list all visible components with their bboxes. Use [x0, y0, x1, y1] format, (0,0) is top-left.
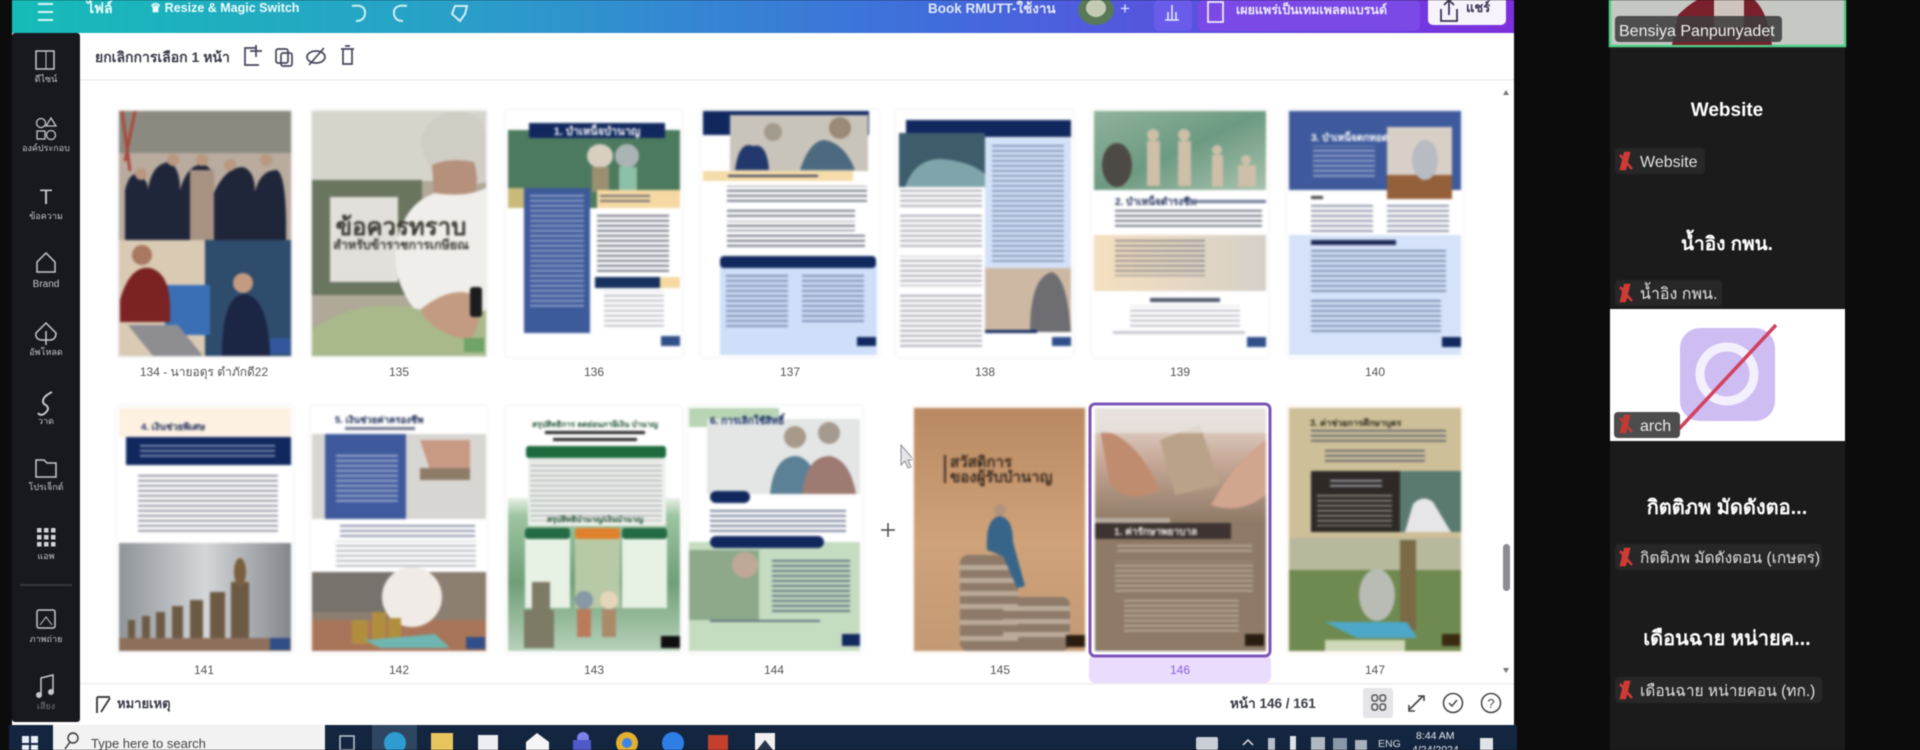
- text icon: ข้อความ: [29, 211, 63, 221]
- label 135: 135: [389, 365, 409, 379]
- label 134: 134 - นายอดุร ตำภักดี22: [140, 365, 268, 380]
- section heading bar: 1. บำเหน็จบำนาญ: [554, 124, 640, 138]
- cover title: ของผู้รับบำนาญ: [950, 469, 1053, 487]
- analytics button: [1154, 0, 1192, 31]
- page thumbnail 144: [687, 405, 863, 654]
- tile: น้ำอิง กพน.: น้ำอิง กพน.: [1640, 282, 1717, 303]
- design icon: ดีไซน์: [35, 73, 57, 84]
- add page plus: [881, 523, 895, 537]
- grid view button: [1363, 688, 1393, 718]
- draw icon: วาด: [38, 416, 54, 426]
- thumbnail title: สำหรับข้าราชการเกษียณ: [333, 238, 469, 252]
- page counter: หน้า 146 / 161: [1230, 696, 1316, 711]
- help icon: ?: [1487, 696, 1495, 711]
- deselect label: ยกเลิกการเลือก 1 หน้า: [95, 49, 230, 65]
- tile: น้ำอิง กพน.: [1615, 229, 1773, 306]
- resize and magic switch label: ♛ Resize & Magic Switch: [150, 1, 299, 15]
- page thumbnail 139: [1091, 109, 1269, 358]
- page thumbnail 143: [505, 405, 683, 654]
- projects icon: [28, 460, 64, 492]
- Windows taskbar: [9, 725, 1517, 750]
- section heading bar: 1. ค่ารักษาพยาบาล: [1114, 526, 1197, 538]
- scrollbar: [1503, 90, 1510, 673]
- cover title: [944, 453, 1053, 487]
- toolbar icons: [245, 45, 354, 66]
- section heading: 6. การเลิกใช้สิทธิ์: [710, 413, 786, 427]
- label 137: 137: [780, 365, 800, 379]
- camera-app avatar: [1680, 328, 1775, 421]
- active speaker tile: [1610, 0, 1845, 46]
- menu icon: [38, 4, 53, 20]
- page thumbnail 136: [505, 109, 683, 358]
- three benefit cards: [525, 528, 667, 608]
- label 147: 147: [1365, 663, 1385, 677]
- system tray: [1196, 730, 1493, 750]
- draw icon: [38, 392, 54, 426]
- brand icon: Brand: [33, 279, 59, 290]
- notes button: หมายเหตุ: [117, 696, 171, 712]
- page thumbnail 134: [117, 109, 293, 358]
- taskbar app icons: [340, 725, 775, 750]
- summary heading: สรุปสิทธิการ ลดย่อนภาษีเงิน บำนาญ: [532, 419, 658, 430]
- thumbnail title: ข้อควรทราบ: [336, 214, 466, 241]
- top header bar: [12, 0, 1514, 33]
- section heading bar: [529, 123, 665, 138]
- uploads icon: อัพโหลด: [29, 347, 63, 357]
- label 142: 142: [389, 663, 409, 677]
- section heading: [1115, 194, 1266, 208]
- upgrade button: [1198, 0, 1420, 31]
- cover title: สวัสดิการ: [950, 453, 1013, 471]
- file menu label: ไฟล์: [85, 0, 113, 16]
- page thumbnail 142: [310, 405, 488, 654]
- tile: Website: Website: [1640, 154, 1698, 171]
- section heading: 2. บำเหน็จดำรงชีพ: [1115, 194, 1197, 208]
- page thumbnail 137: [700, 109, 880, 358]
- section heading: 3. ค่าช่วยการศึกษาบุตร: [1310, 418, 1402, 429]
- audio icon: เสียง: [37, 701, 55, 711]
- thumbnail title: [333, 214, 469, 252]
- tile: Website: Website: [1691, 100, 1763, 121]
- checkmark icon: [1444, 694, 1462, 712]
- tile: เดือนฉาย: เดือนฉาย หน่ายค...: [1643, 627, 1811, 650]
- mouse cursor: [901, 445, 914, 468]
- camera-off slash: [1678, 325, 1776, 430]
- page thumbnail 143: สรุปสิทธิบำนาญ/เงินบำนาญ: [547, 515, 643, 525]
- selected page thumbnail 146: [1089, 404, 1271, 683]
- section heading: 5. เงินช่วยค่าครองชีพ: [335, 414, 424, 426]
- system tray: ENG: [1378, 738, 1401, 750]
- name label: arch: [1640, 418, 1671, 435]
- label 140: 140: [1365, 365, 1385, 379]
- label 144: 144: [764, 663, 784, 677]
- undo redo and cloud icons: [352, 6, 467, 21]
- label 138: 138: [975, 365, 995, 379]
- selection toolbar: [80, 45, 1514, 80]
- start button: [22, 736, 38, 750]
- share button: แชร์: [1466, 0, 1490, 15]
- tile: Website: [1615, 100, 1763, 174]
- speaker name label: Bensiya Panpunyadet: [1619, 23, 1775, 40]
- help icon: [1482, 694, 1500, 712]
- tile: กิตติภพ: กิตติภพ มัดดังตอน (เกษตร): [1640, 550, 1820, 567]
- tile: เดือนฉาย: เดือนฉาย หน่ายคอน (ทก.): [1640, 682, 1815, 700]
- page thumbnail 138: [895, 109, 1074, 358]
- tile: arch: [1610, 309, 1845, 441]
- photos icon: ภาพถ่าย: [30, 634, 62, 644]
- apps icon: แอพ: [37, 551, 55, 561]
- label 145: 145: [990, 663, 1010, 677]
- text icon: T: [40, 186, 53, 209]
- notes button: [97, 696, 171, 713]
- tile: น้ำอิง กพน.: น้ำอิง กพน.: [1681, 229, 1773, 255]
- projects icon: โปรเจ็กต์: [28, 480, 64, 492]
- section heading bar: [1095, 523, 1231, 539]
- elements icon: [22, 118, 70, 153]
- label 143: 143: [584, 663, 604, 677]
- apps icon: [37, 528, 56, 561]
- photos icon: [30, 610, 62, 644]
- page thumbnail 141: [116, 405, 294, 654]
- design icon: [35, 51, 57, 84]
- label 146: 146: [1170, 663, 1190, 677]
- tile: กิตติภพ: [1615, 497, 1822, 570]
- tile: เดือนฉาย: [1615, 627, 1822, 703]
- search box: [53, 725, 325, 750]
- fullscreen icon: [1409, 696, 1424, 711]
- profile badge: [1078, 0, 1130, 25]
- audio icon: [36, 675, 55, 711]
- label 139: 139: [1170, 365, 1190, 379]
- summary table: [526, 446, 666, 526]
- page thumbnail 140: [1286, 109, 1464, 358]
- tile: กิตติภพ: กิตติภพ มัดดังตอ...: [1647, 497, 1807, 519]
- share button: [1428, 0, 1506, 25]
- section heading: 3. บำเหน็จตกทอด: [1311, 130, 1388, 144]
- Zoom participant column: [1610, 0, 1845, 750]
- page thumbnail 135: [310, 109, 488, 358]
- system tray: 8:44 AM: [1416, 730, 1455, 742]
- elements icon: องค์ประกอบ: [22, 142, 70, 153]
- text icon: [29, 186, 63, 221]
- Canva canvas area: [12, 33, 1514, 725]
- page thumbnail 145: [912, 405, 1088, 654]
- name label: [1614, 412, 1680, 438]
- section heading: 4. เงินช่วยพิเศษ: [141, 422, 206, 433]
- left sidebar: [12, 33, 80, 722]
- brand icon: [33, 253, 59, 290]
- speaker name label: [1615, 16, 1782, 42]
- page thumbnail 147: [1286, 405, 1464, 654]
- bottom status bar: [80, 683, 1514, 718]
- label 141: 141: [194, 663, 214, 677]
- document title: Book RMUTT-ใช้งาน: [928, 0, 1056, 16]
- upgrade button: เผยแพร่เป็นเทมเพลตแบรนด์: [1236, 2, 1387, 17]
- uploads icon: [29, 323, 63, 357]
- label 136: 136: [584, 365, 604, 379]
